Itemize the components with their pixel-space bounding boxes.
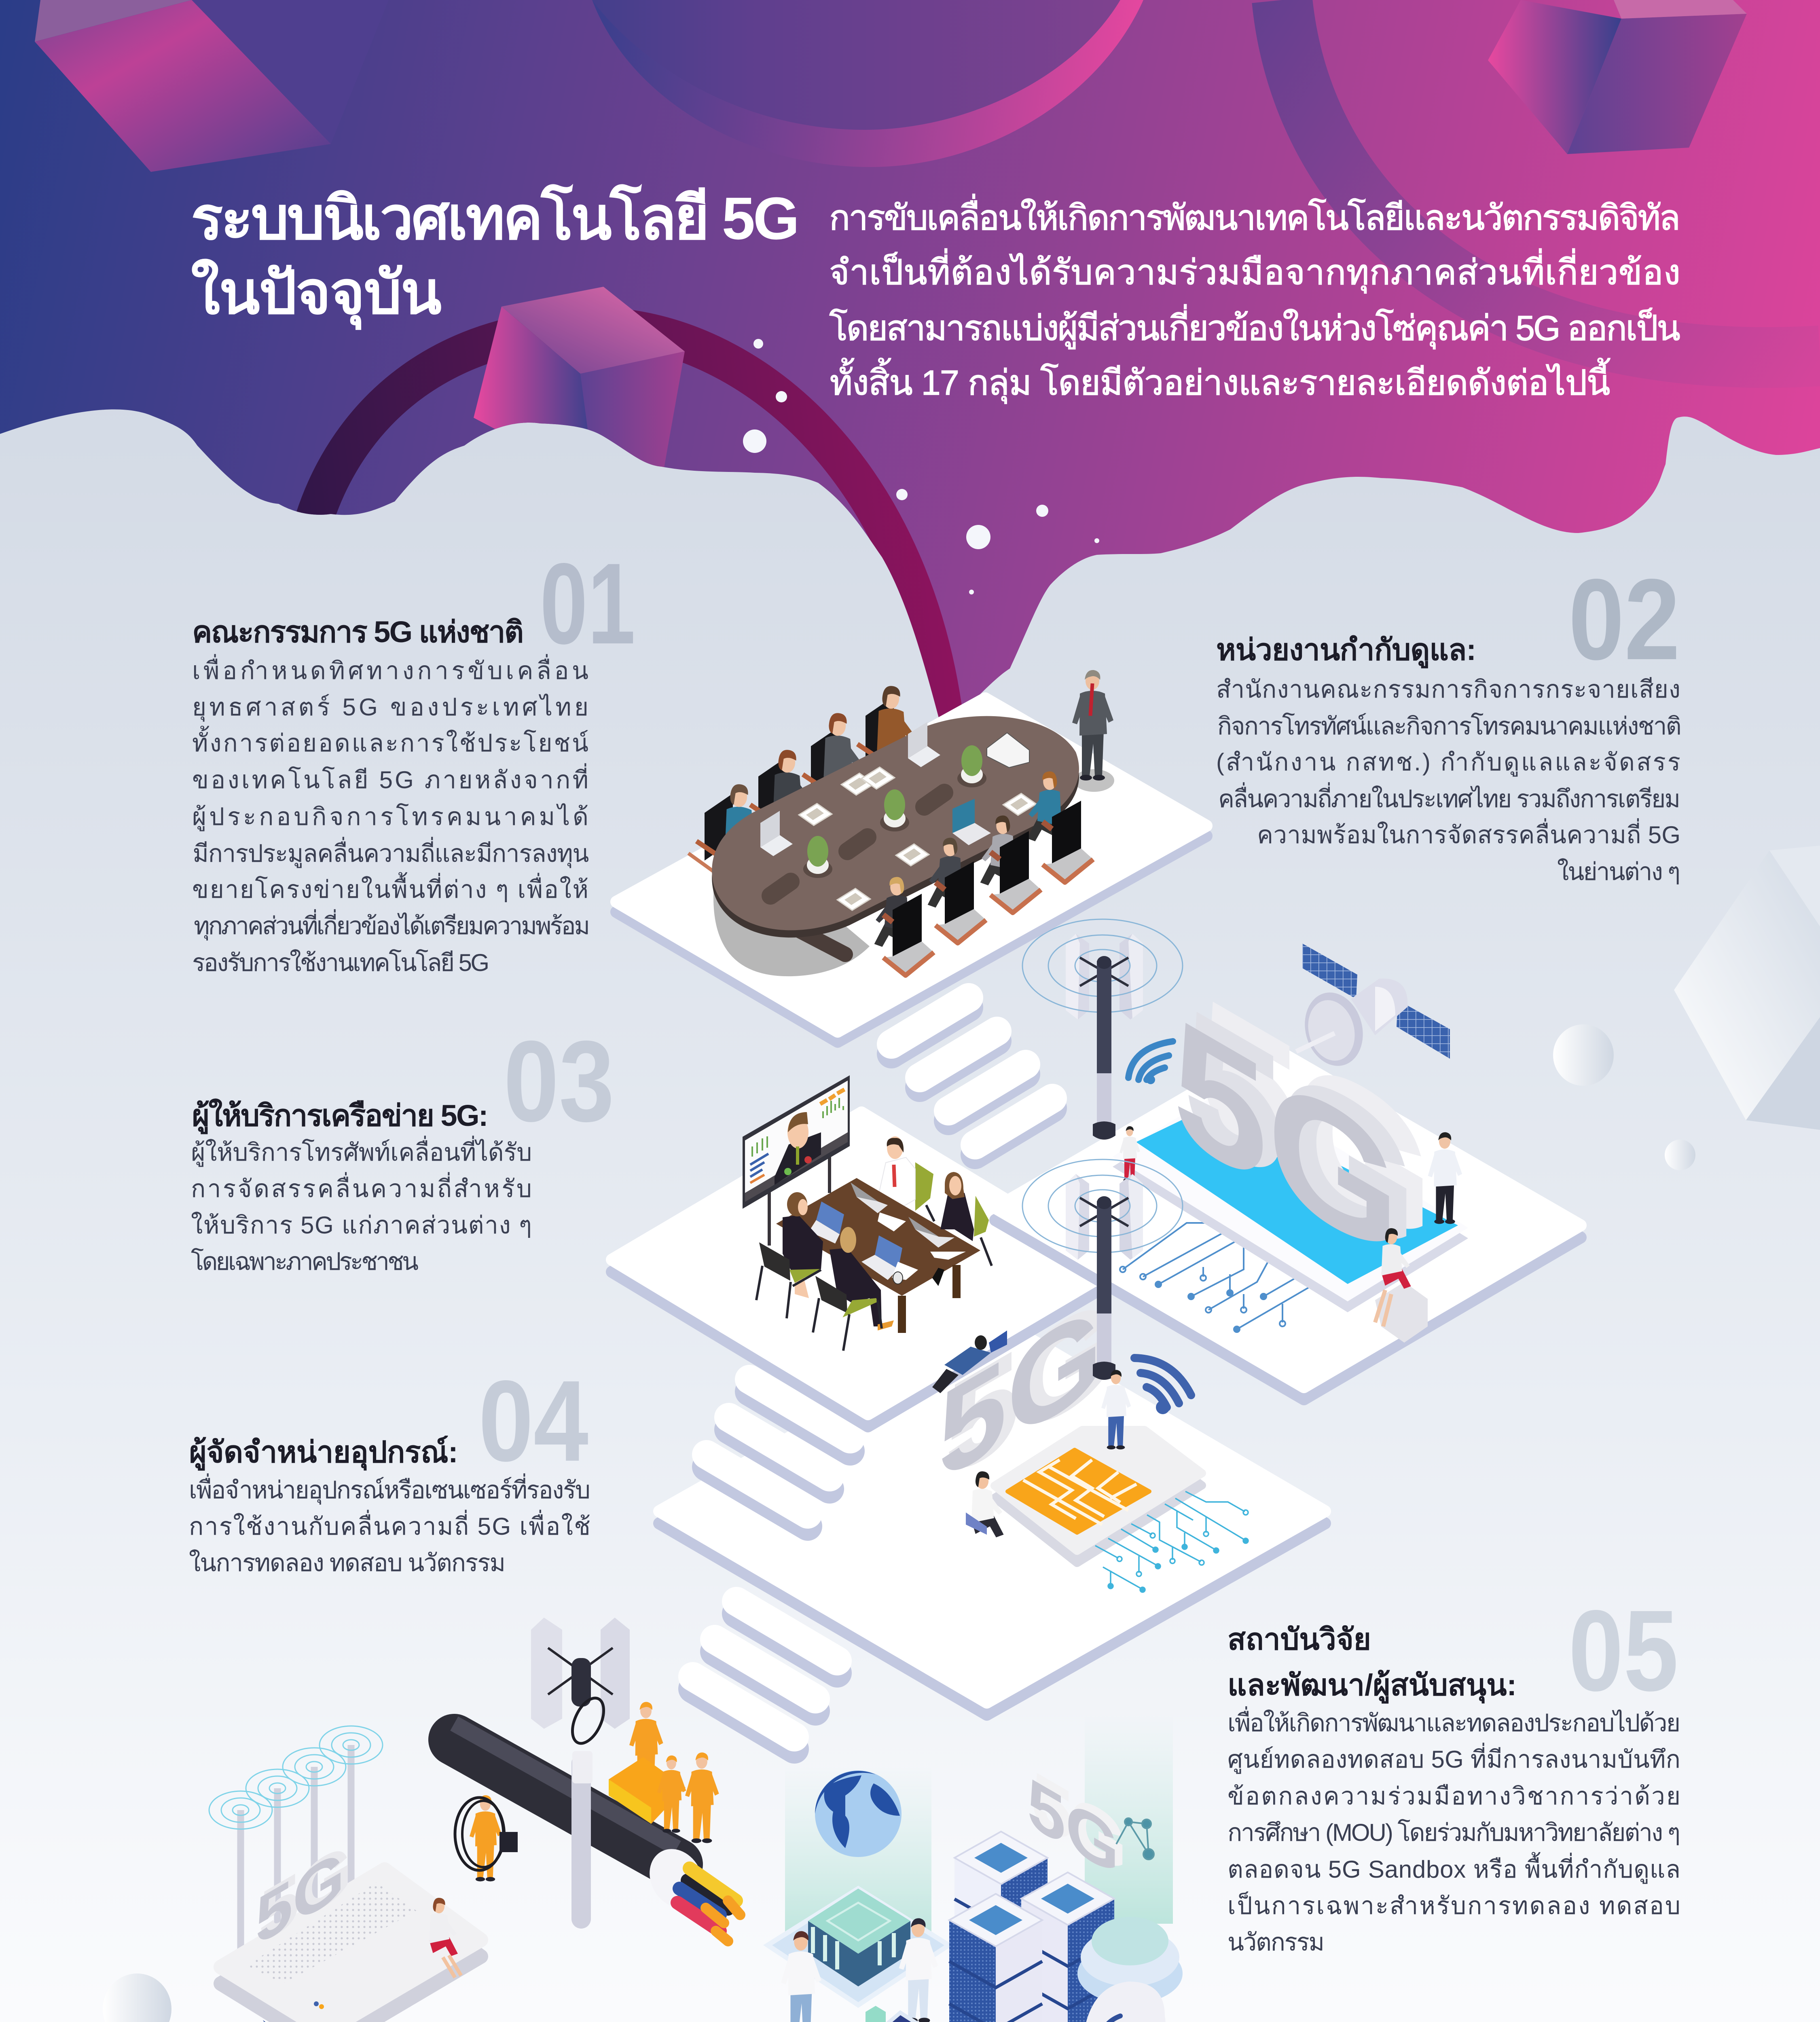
heading 05: สถาบันวิจัย xyxy=(1227,1622,1371,1656)
decorative shapes: right cube and spheres xyxy=(1553,846,1820,1170)
projector xyxy=(987,733,1029,768)
body 05: ข้อตกลงความร่วมมือทางวิชาการว่าด้วย xyxy=(1227,1783,1680,1810)
router body xyxy=(221,1886,481,2022)
body 04 xyxy=(189,1473,590,1576)
body 05: นวัตกรรม xyxy=(1227,1929,1325,1956)
man in white shirt xyxy=(878,1136,915,1207)
body 01: ยุทธศาสตร์ 5G ของประเทศไทย xyxy=(192,693,588,722)
header intro paragraph: ทั้งสิ้น 17 กลุ่ม โดยมีตัวอย่างและรายละเอียดดังต่อไปนี้ xyxy=(830,358,1610,404)
right-row chairs xyxy=(1043,801,1093,882)
body 03 xyxy=(191,1136,532,1275)
circuit lines on platform 2 xyxy=(1120,1223,1314,1332)
chip with engineers xyxy=(768,1889,949,2022)
smartphone with 5G letters xyxy=(1113,963,1468,1312)
heading 05 xyxy=(1227,1622,1517,1704)
number 05: 05 xyxy=(1568,1586,1678,1715)
body 05: ตลอดจน 5G Sandbox หรือ พื้นที่กำกับดูแล xyxy=(1227,1852,1680,1884)
body 05: เพื่อให้เกิดการพัฒนาและทดลองประกอบไปด้วย xyxy=(1227,1706,1680,1736)
stair pills group 1 xyxy=(891,998,1052,1155)
body 02: ความพร้อมในการจัดสรรคลื่นความถี่ 5G xyxy=(1257,818,1680,848)
left-row people xyxy=(877,686,919,772)
top-right cube xyxy=(1488,0,1747,154)
title: ในปัจจุบัน xyxy=(191,258,442,330)
header intro paragraph xyxy=(829,194,1680,404)
body 03: การจัดสรรคลื่นความถี่สำหรับ xyxy=(191,1172,532,1202)
section 05 xyxy=(1227,1586,1680,1956)
satellite xyxy=(1296,943,1450,1072)
heading 03: ผู้ให้บริการเครือข่าย 5G: xyxy=(192,1098,489,1134)
woman bottom seated xyxy=(830,1227,894,1330)
papers xyxy=(878,1212,906,1231)
laptops xyxy=(908,722,940,767)
platform 1: meeting room xyxy=(616,698,1206,1042)
stair pills lower groups xyxy=(693,1379,850,1749)
title xyxy=(191,184,800,330)
chair 2 xyxy=(815,1276,847,1313)
right-row people xyxy=(1027,771,1061,841)
screen stand xyxy=(769,1157,830,1246)
body 04: เพื่อจำหน่ายอุปกรณ์หรือเซนเซอร์ที่รองรับ xyxy=(189,1473,590,1505)
number 04: 04 xyxy=(478,1357,589,1485)
people around SIM xyxy=(932,1330,1131,1538)
heading 02: หน่วยงานกำกับดูแล: xyxy=(1216,633,1476,668)
body 02: ในย่านต่าง ๆ xyxy=(1557,858,1680,885)
tower C with workers xyxy=(531,1618,719,1919)
left-row chairs xyxy=(849,696,914,783)
body 04: ในการทดลอง ทดสอบ นวัตกรรม xyxy=(189,1549,506,1576)
body 05 xyxy=(1227,1706,1680,1956)
5G router with antennas xyxy=(209,1726,481,2022)
server racks xyxy=(949,1832,1114,2022)
5G router with antennas: 5G xyxy=(256,1834,345,1960)
molecule network icon xyxy=(1116,1818,1154,1859)
platform 2: 5G phone xyxy=(995,1047,1581,1399)
section 02 xyxy=(1216,555,1682,885)
control console xyxy=(861,2013,971,2022)
wifi icon xyxy=(1128,1041,1173,1082)
body 01 xyxy=(192,654,590,976)
body 01: ของเทคโนโลยี 5G ภายหลังจากที่ xyxy=(192,763,588,793)
body 03: โดยเฉพาะภาคประชาชน xyxy=(191,1248,419,1275)
woman left seated xyxy=(783,1192,823,1298)
header intro paragraph: โดยสามารถแบ่งผู้มีส่วนเกี่ยวข้องในห่วงโซ่คุณค่า 5G ออกเป็น xyxy=(829,304,1680,349)
green chairs behind man and woman xyxy=(915,1162,933,1211)
heading 04: ผู้จัดจำหน่ายอุปกรณ์: xyxy=(189,1435,458,1471)
body 05: เป็นการเฉพาะสำหรับการทดลอง ทดสอบ xyxy=(1227,1891,1680,1919)
section 03 xyxy=(191,1017,614,1275)
SIM card xyxy=(995,1430,1202,1563)
man lying xyxy=(259,2020,342,2022)
plants xyxy=(957,745,986,787)
gray laptops xyxy=(851,1182,878,1212)
wifi icon large xyxy=(1134,1358,1191,1410)
disk, cloud and wifi xyxy=(1042,1917,1183,2022)
small 5G above servers: 5G xyxy=(1033,1758,1125,1888)
body 01: ทุกภาคส่วนที่เกี่ยวข้องได้เตรียมความพร้อม xyxy=(194,909,590,941)
chair 1 xyxy=(759,1242,790,1281)
section 01 xyxy=(192,539,635,976)
body 03: ผู้ให้บริการโทรศัพท์เคลื่อนที่ได้รับ xyxy=(191,1136,532,1167)
meeting table illustration xyxy=(688,670,1114,976)
body 02: (สำนักงาน กสทช.) กำกับดูแลและจัดสรร xyxy=(1216,749,1680,777)
body 02 xyxy=(1216,676,1682,885)
teal data beams xyxy=(785,1713,1173,1941)
body 01: ขยายโครงข่ายในพื้นที่ต่าง ๆ เพื่อให้ xyxy=(192,872,588,903)
center cube xyxy=(474,287,685,481)
body 01: เพื่อกำหนดทิศทางการขับเคลื่อน xyxy=(192,654,588,684)
table shadow and base xyxy=(713,882,870,976)
body 02: สำนักงานคณะกรรมการกิจการกระจายเสียง xyxy=(1216,676,1680,703)
title: ระบบนิเวศเทคโนโลยี 5G xyxy=(191,184,800,252)
documents on table xyxy=(841,773,874,795)
people around phone xyxy=(1120,1126,1462,1343)
left dark ring xyxy=(313,327,944,720)
smartphone with 5G letters: 5G xyxy=(1203,963,1430,1284)
top-left cube xyxy=(35,0,389,172)
presenter xyxy=(1072,670,1113,780)
5G router with antennas: 5G xyxy=(261,1829,350,1955)
platform 3: video conference xyxy=(612,1113,1117,1426)
platform 4: SIM xyxy=(659,1320,1325,1715)
header intro paragraph: การขับเคลื่อนให้เกิดการพัฒนาเทคโนโลยีและนวัตกรรมดิจิทัล xyxy=(829,194,1680,237)
table top xyxy=(712,723,1079,937)
3D 5G on platform 4: 5G xyxy=(938,1275,1103,1508)
antennas xyxy=(241,1745,351,1973)
conference table xyxy=(776,1178,980,1296)
circuit lines under SIM xyxy=(1095,1491,1248,1592)
lift and workers xyxy=(629,1702,663,1792)
video conference illustration xyxy=(743,1075,992,1351)
decorative shapes: bottom-left cubes and arc xyxy=(0,1973,688,2022)
woman right xyxy=(932,1172,974,1286)
section 04 xyxy=(189,1357,590,1576)
body 05: การศึกษา (MOU) โดยร่วมกับมหาวิทยาลัยต่าง ๆ xyxy=(1227,1819,1680,1846)
right ring xyxy=(1282,0,1820,357)
number 01: 01 xyxy=(540,539,635,668)
smartphone with 5G letters: 5G xyxy=(1173,979,1399,1300)
heading 05: และพัฒนา/ผู้สนับสนุน: xyxy=(1227,1668,1517,1704)
3D 5G on platform 4: 5G xyxy=(948,1269,1113,1502)
heading 01: คณะกรรมการ 5G แห่งชาติ xyxy=(192,615,524,649)
worker carrying cable coil xyxy=(455,1795,518,1881)
number 02: 02 xyxy=(1568,555,1680,684)
number 03: 03 xyxy=(504,1017,614,1146)
body 04: การใช้งานกับคลื่นความถี่ 5G เพื่อใช้ xyxy=(189,1510,590,1540)
body 02: กิจการโทรทัศน์และกิจการโทรคมนาคมแห่งชาติ xyxy=(1217,712,1682,740)
table ovals xyxy=(770,793,944,896)
body 05: ศูนย์ทดลองทดสอบ 5G ที่มีการลงนามบันทึก xyxy=(1227,1743,1680,1774)
tower A xyxy=(1022,919,1183,1140)
tower B xyxy=(1022,1159,1183,1380)
blue laptops xyxy=(816,1201,844,1234)
header intro paragraph: จำเป็นที่ต้องได้รับความร่วมมือจากทุกภาคส่วนที่เกี่ยวข้อง xyxy=(829,248,1680,294)
body 01: ผู้ประกอบกิจการโทรคมนาคมได้ xyxy=(192,803,588,831)
small 5G above servers: 5G xyxy=(1027,1762,1119,1892)
body 01: รองรับการใช้งานเทคโนโลยี 5G xyxy=(192,949,489,976)
header blob with gradient, rings and cubes xyxy=(0,0,1820,728)
fiber-optic cable xyxy=(454,1724,740,1941)
globe xyxy=(815,1770,902,1857)
woman on router xyxy=(430,1898,458,1956)
top ring xyxy=(592,0,1143,167)
body 03: ให้บริการ 5G แก่ภาคส่วนต่าง ๆ xyxy=(191,1212,532,1239)
white droplets xyxy=(743,339,1099,594)
body 01: ทั้งการต่อยอดและการใช้ประโยชน์ xyxy=(192,725,588,757)
smartphone with 5G letters: 5G xyxy=(1187,973,1414,1294)
video wall xyxy=(743,1075,850,1209)
body 01: มีการประมูลคลื่นความถี่และมีการลงทุน xyxy=(193,837,589,868)
body 02: คลื่นความถี่ภายในประเทศไทย รวมถึงการเตรียม xyxy=(1218,782,1680,812)
